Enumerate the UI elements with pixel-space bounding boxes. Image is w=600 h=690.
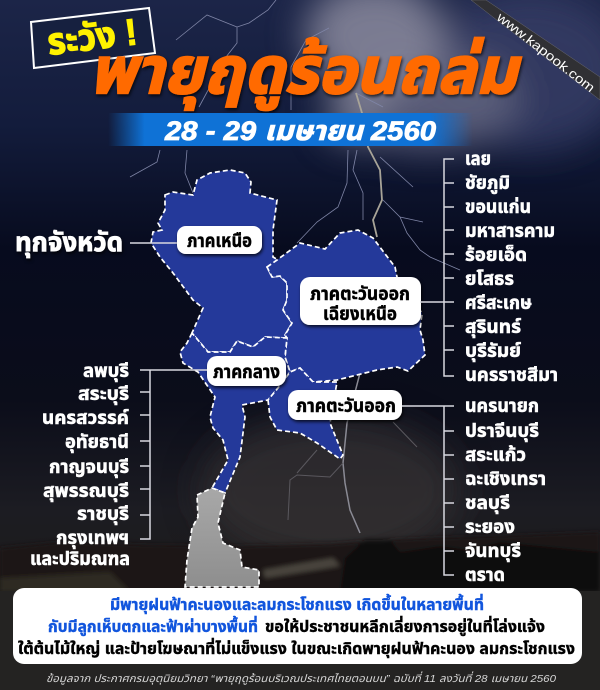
map region: northeast	[267, 230, 425, 382]
province list: central: อุทัยธานี	[65, 432, 129, 453]
province list: northeast: ชัยภูมิ	[465, 173, 510, 194]
ribbon: website url: www.kapook.com	[493, 9, 598, 95]
region label: northeast	[300, 277, 421, 325]
source note: ข้อมูลจาก ประกาศกรมอุตุนิยมวิทยา “พายุฤดูร้อนบริเวณประเทศไทยตอนบน” ฉบับที่ 11 ลงวันที่ 28 เมษายน 2560	[46, 671, 556, 685]
region label: east	[288, 390, 402, 420]
province list: central: และปริมณฑล	[30, 549, 130, 570]
warning text panel: กับมีลูกเห็บตกและฟ้าผ่าบางพื้นที่	[48, 615, 258, 637]
warning text panel: มีพายุฝนฟ้าคะนองและลมกระโชกแรง เกิดขึ้นในหลายพื้นที่	[110, 593, 484, 614]
province list: east: นครนายก	[465, 396, 539, 417]
province list: central: กรุงเทพฯ	[56, 528, 129, 549]
province list: northeast: บุรีรัมย์	[465, 341, 521, 362]
warning stamp: beware: ระวัง !	[45, 11, 139, 63]
label: all provinces: ทุกจังหวัด	[15, 227, 123, 258]
province list: northeast: สุรินทร์	[465, 317, 521, 338]
province list: central: นครสวรรค์	[42, 408, 129, 429]
province list: central: สระบุรี	[78, 384, 129, 405]
province list: central	[30, 361, 207, 570]
province list: central: สุพรรณบุรี	[43, 481, 129, 502]
map region: east	[268, 368, 343, 459]
map region: south (grey)	[185, 488, 259, 587]
warning text panel: ใต้ต้นไม้ใหญ่ และป้ายโฆษณาที่ไม่แข็งแรง ในขณะเกิดพายุฝนฟ้าคะนอง ลมกระโชกแรง	[18, 637, 575, 658]
province list: northeast: ขอนแก่น	[465, 196, 531, 218]
province list: central: กาญจนบุรี	[49, 457, 129, 478]
region label: northeast: ภาคตะวันออก	[310, 284, 410, 305]
province list: northeast: เลย	[465, 149, 491, 170]
province list: east: ฉะเชิงเทรา	[465, 469, 546, 490]
province list: east: ชลบุรี	[465, 493, 510, 514]
province list: east: ปราจีนบุรี	[465, 421, 539, 442]
bottom strip	[0, 591, 600, 690]
date banner	[108, 113, 473, 146]
map region: north	[151, 170, 292, 352]
province list: northeast	[420, 149, 558, 386]
map region: central	[180, 333, 290, 493]
connector: all provinces to north	[130, 242, 200, 244]
warning stamp: beware	[31, 8, 155, 68]
province list: northeast: ร้อยเอ็ด	[465, 243, 527, 266]
region label: east: ภาคตะวันออก	[296, 396, 396, 417]
province list: east: ตราด	[465, 565, 505, 586]
province list: east	[402, 396, 546, 586]
province list: east: ระยอง	[465, 517, 515, 538]
province list: northeast: ศรีสะเกษ	[465, 293, 532, 314]
province list: northeast: มหาสารคาม	[465, 221, 555, 242]
map of Thailand	[151, 170, 425, 587]
province list: central: ราชบุรี	[77, 504, 129, 525]
warning text panel: ขอให้ประชาชนหลีกเลี่ยงการอยู่ในที่โล่งแจ้ง	[265, 615, 545, 637]
region label: central: ภาคกลาง	[213, 362, 280, 383]
title: พายุฤดูร้อนถล่ม	[89, 34, 522, 111]
province list: east: จันทบุรี	[465, 541, 521, 562]
province list: east: สระแก้ว	[465, 444, 526, 466]
ribbon: website url	[471, 0, 600, 100]
horizon tree line	[0, 532, 600, 592]
province list: northeast: นครราชสีมา	[465, 365, 558, 386]
lightning bolts	[130, 0, 460, 533]
province list: northeast: ยโสธร	[465, 269, 514, 290]
date banner: 28 - 29 เมษายน 2560	[164, 116, 436, 146]
warning text panel	[13, 588, 582, 664]
region label: central	[207, 356, 286, 386]
region label: north: ภาคเหนือ	[187, 231, 252, 252]
province list: central: ลพบุรี	[83, 361, 129, 382]
region label: northeast: เฉียงเหนือ	[323, 304, 397, 325]
region label: north	[177, 226, 262, 254]
